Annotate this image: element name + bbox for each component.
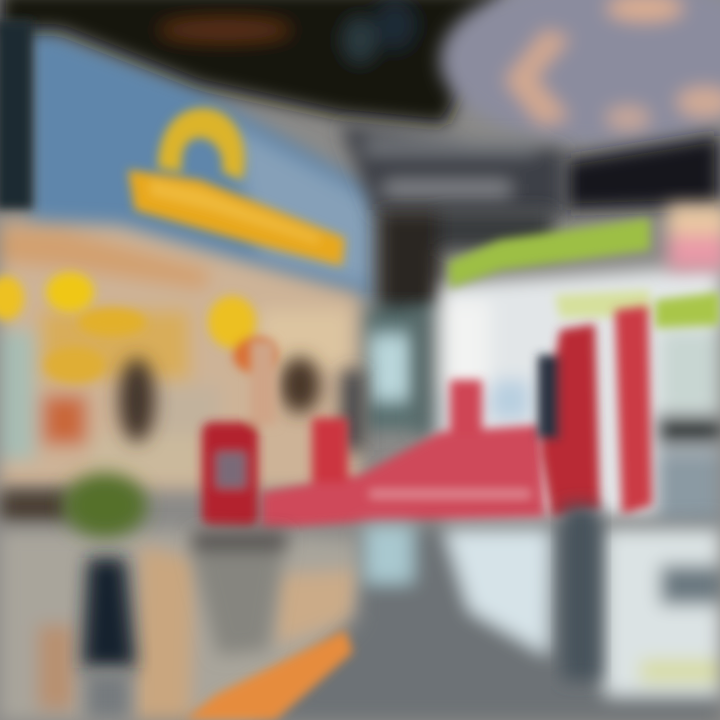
panel: pink corner sign [668, 205, 720, 270]
panel: grey pedestal shadow [190, 532, 287, 655]
panel: yellow shop lights [0, 272, 277, 383]
panel: floor left [0, 490, 370, 720]
panel: red banner [262, 380, 545, 530]
panel: green store sign [448, 218, 720, 328]
icon: yellow store sign [128, 108, 345, 266]
icon: orange floor stripe [185, 630, 353, 720]
panel: dark left column [0, 20, 33, 210]
panel: red shopper [202, 340, 276, 528]
panel: dark central passage [360, 210, 553, 430]
panel: floor right [270, 520, 720, 720]
panel: dark band right [565, 135, 720, 210]
panel: oval ceiling with lights [440, 0, 720, 145]
panel: dark ceiling [0, 0, 510, 125]
panel: person on right [562, 505, 600, 680]
panel: red vertical banners [538, 306, 652, 518]
icon: potted plant [63, 473, 147, 720]
panel: shoppers in store [119, 357, 364, 450]
panel: right white store [415, 265, 720, 525]
panel: central grey sign [340, 125, 565, 215]
panel: left storefront [0, 220, 360, 490]
panel: blue storefront wall [30, 25, 375, 300]
